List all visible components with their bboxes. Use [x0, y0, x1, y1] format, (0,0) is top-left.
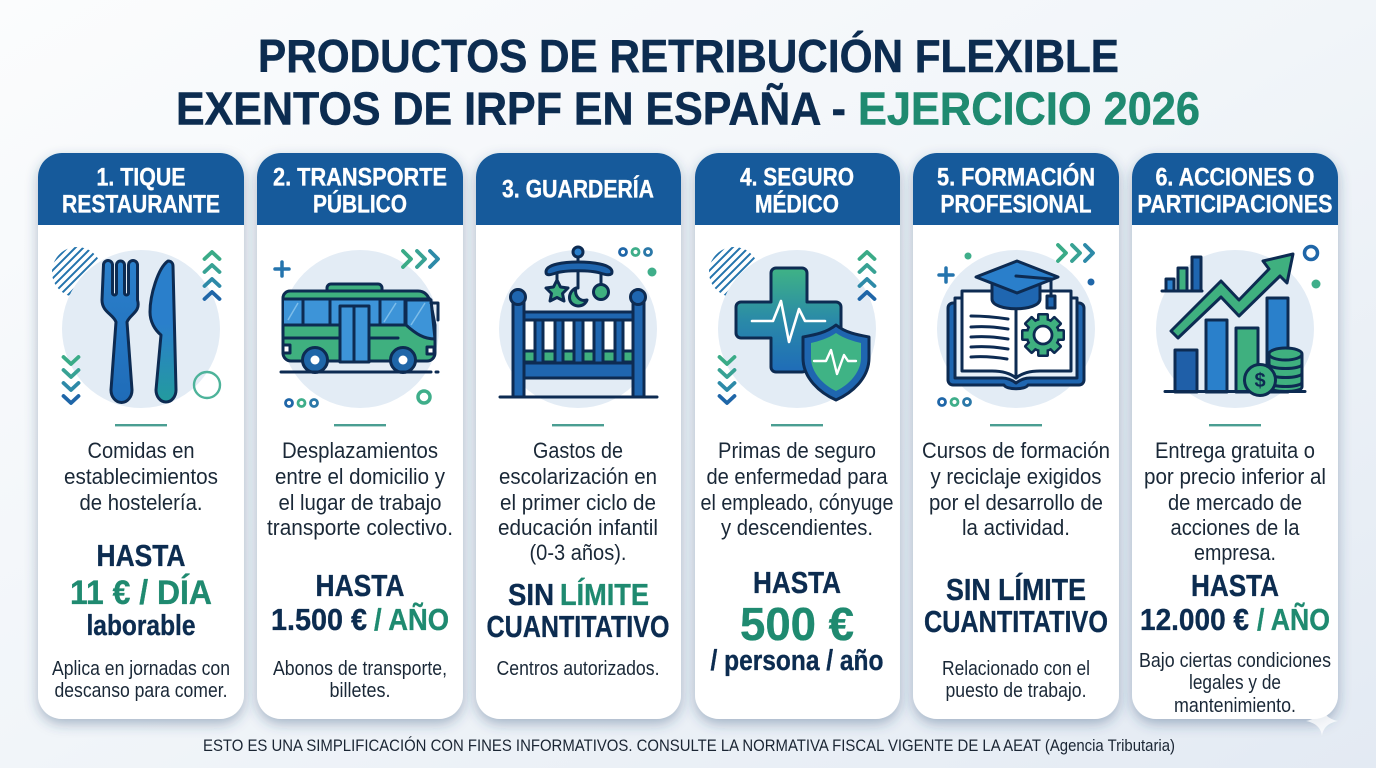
panel: seguro medico: [695, 153, 900, 719]
limit value: HASTA: [316, 568, 404, 603]
header band: [1132, 153, 1338, 225]
limit value: HASTA: [96, 538, 186, 573]
note: Bajo ciertas condiciones: [1139, 650, 1331, 672]
description: transporte colectivo.: [267, 515, 453, 540]
description: Gastos de: [533, 438, 623, 463]
description: de hostelería.: [80, 490, 202, 515]
note: descanso para comer.: [54, 680, 228, 702]
description: la actividad.: [962, 515, 1070, 540]
limit value: / persona / año: [710, 645, 884, 677]
note: [273, 658, 447, 702]
description: el primer ciclo de: [500, 490, 656, 515]
limit value: laborable: [86, 610, 196, 642]
panel: tique restaurante: [38, 153, 244, 719]
description: [700, 438, 894, 540]
limit value: [486, 577, 670, 644]
description: Cursos de formación: [922, 438, 1110, 463]
description: Primas de seguro: [718, 438, 876, 463]
heading: MÉDICO: [755, 190, 839, 218]
heading: PROFESIONAL: [940, 190, 1092, 218]
panel: guarderia: [476, 153, 681, 719]
description: [64, 438, 218, 515]
header band: [913, 153, 1119, 225]
heading: 5. FORMACIÓN: [937, 162, 1095, 192]
limit value: LÍMITE: [560, 577, 649, 612]
header band: [38, 153, 244, 225]
panel: transporte publico: [257, 153, 463, 719]
note: [52, 658, 230, 702]
limit value: CUANTITATIVO: [486, 609, 670, 644]
description: [267, 438, 453, 540]
heading: 4. SEGURO: [740, 164, 854, 192]
heading: 2. TRANSPORTE: [273, 164, 447, 192]
limit value: / AÑO: [1257, 602, 1330, 637]
footer disclaimer: ESTO ES UNA SIMPLIFICACIÓN CON FINES INFORMATIVOS. CONSULTE LA NORMATIVA FISCAL VIGENTE DE LA AEAT (Agencia Tributaria): [203, 736, 1175, 755]
limit value: [924, 572, 1108, 639]
description: escolarización en: [499, 464, 657, 489]
description: (0-3 años).: [530, 540, 626, 565]
description: de mercado de: [1168, 490, 1302, 515]
note: [1139, 650, 1331, 717]
description: [1144, 438, 1326, 565]
limit value: HASTA: [753, 565, 841, 600]
description: el lugar de trabajo: [278, 490, 442, 515]
note: legales y de: [1189, 672, 1281, 694]
heading: 3. GUARDERÍA: [502, 174, 654, 204]
heading: [62, 164, 220, 218]
description: empresa.: [1194, 540, 1276, 565]
note: [942, 658, 1090, 702]
header band: [476, 153, 681, 225]
icon: growth chart and coins: $: [1254, 370, 1266, 392]
description: [498, 438, 658, 565]
limit value: HASTA: [1191, 568, 1279, 603]
limit value: SIN: [508, 577, 554, 612]
note: Relacionado con el: [942, 658, 1090, 680]
description: por precio inferior al: [1144, 464, 1326, 489]
description: acciones de la: [1170, 515, 1300, 540]
limit value: 12.000 €: [1140, 602, 1249, 637]
divider: [115, 424, 167, 426]
heading: [937, 162, 1095, 218]
limit value: 500 €: [740, 598, 854, 650]
description: entre el domicilio y: [275, 464, 445, 489]
description: establecimientos: [64, 464, 218, 489]
limit value: [271, 568, 449, 637]
description: el empleado, cónyuge: [700, 490, 894, 515]
icon: bus: [275, 250, 439, 408]
description: por el desarrollo de: [929, 490, 1103, 515]
icon: crib with mobile: [499, 247, 657, 408]
icon: book with graduation cap: [937, 245, 1095, 408]
description: [922, 438, 1110, 540]
description: Comidas en: [88, 438, 194, 463]
icon: medical cross and shield: [704, 242, 876, 408]
note: Centros autorizados.: [496, 658, 660, 680]
heading: PÚBLICO: [313, 188, 407, 218]
heading: [740, 164, 854, 218]
title: EJERCICIO 2026: [858, 82, 1200, 134]
description: y reciclaje exigidos: [930, 464, 1102, 489]
limit value: / AÑO: [374, 602, 449, 637]
description: de enfermedad para: [706, 464, 888, 489]
description: educación infantil: [498, 515, 658, 540]
panel: acciones o participaciones: [1132, 153, 1338, 719]
note: Aplica en jornadas con: [52, 658, 230, 680]
heading: [1138, 164, 1332, 218]
description: Desplazamientos: [282, 438, 438, 463]
heading: 1. TIQUE: [96, 164, 186, 192]
heading: PARTICIPACIONES: [1138, 190, 1332, 218]
heading: RESTAURANTE: [62, 190, 220, 218]
divider: [334, 424, 386, 426]
limit value: 1.500 €: [271, 602, 367, 637]
title: [176, 30, 1200, 134]
limit value: SIN LÍMITE: [946, 572, 1086, 607]
note: Abonos de transporte,: [273, 658, 447, 680]
icon: fork and knife: [47, 242, 220, 408]
icon: sparkle watermark: [1306, 704, 1338, 736]
limit value: [710, 565, 884, 677]
icon: growth chart and coins: [1156, 246, 1320, 408]
title: PRODUCTOS DE RETRIBUCIÓN FLEXIBLE: [258, 30, 1119, 82]
description: Entrega gratuita o: [1155, 438, 1315, 463]
limit value: [70, 538, 212, 642]
divider: [771, 424, 823, 426]
divider: [990, 424, 1042, 426]
note: mantenimiento.: [1174, 695, 1296, 717]
heading: [273, 164, 447, 218]
title: EXENTOS DE IRPF EN ESPAÑA -: [176, 82, 846, 134]
header band: [257, 153, 463, 225]
divider: [552, 424, 604, 426]
divider: [1209, 424, 1261, 426]
heading: 6. ACCIONES O: [1156, 164, 1314, 192]
note: billetes.: [330, 680, 390, 702]
description: y descendientes.: [721, 515, 873, 540]
note: puesto de trabajo.: [946, 680, 1086, 702]
limit value: [1140, 568, 1330, 637]
panel: formacion profesional: [913, 153, 1119, 719]
header band: [695, 153, 900, 225]
limit value: 11 € / DÍA: [70, 574, 212, 612]
limit value: CUANTITATIVO: [924, 604, 1108, 639]
